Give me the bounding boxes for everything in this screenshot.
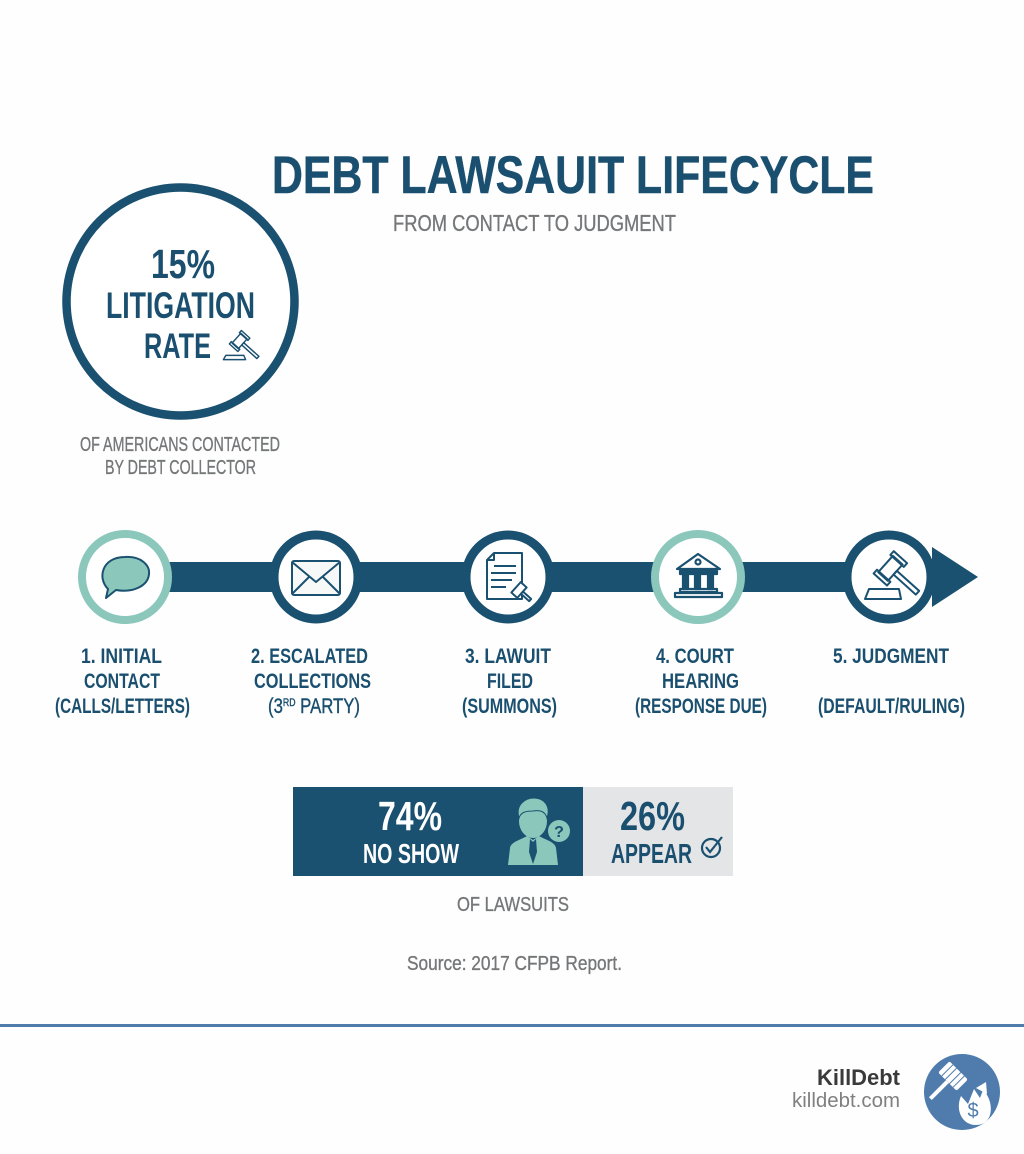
icon: person with question mark	[508, 798, 570, 865]
label: step 4: HEARING	[662, 670, 739, 693]
panel: litigation rate circle	[66, 188, 294, 416]
label: no show: NO SHOW	[363, 838, 459, 869]
icon: speech bubble	[102, 557, 149, 598]
caption: litigation rate	[80, 434, 280, 479]
footer brand text: KillDebt	[817, 1065, 901, 1090]
label: step 3	[462, 645, 557, 718]
icon: person with question mark: ?	[554, 824, 564, 841]
icon: gavel	[865, 551, 928, 604]
label: step 4: 4. COURT	[656, 645, 734, 668]
label: litigation: LITIGATION	[106, 285, 255, 326]
step 2: escalated collections	[251, 535, 371, 718]
label: step 5: 5. JUDGMENT	[833, 645, 949, 668]
bar segment: appear	[583, 787, 733, 876]
label: step 2: PARTY)	[296, 695, 360, 718]
icon: courthouse	[675, 554, 722, 597]
logo: gavel and cracked coin	[921, 1054, 1000, 1130]
footer brand text: killdebt.com	[792, 1090, 900, 1112]
label: step 1: CONTACT	[84, 670, 160, 693]
footer divider	[0, 1024, 1024, 1027]
panel: appearance split bar	[293, 787, 733, 876]
label: appear: APPEAR	[611, 838, 692, 869]
caption: litigation rate: OF AMERICANS CONTACTED	[80, 434, 280, 456]
label: step 5: (DEFAULT/RULING)	[818, 695, 965, 718]
icon: document with gavel	[487, 553, 535, 605]
bar segment: no show	[293, 787, 583, 876]
source note: Source: 2017 CFPB Report.	[407, 953, 622, 975]
label: step 3: FILED	[487, 670, 533, 693]
stat: 15%: 15%	[151, 241, 215, 287]
title: DEBT LAWSAUIT LIFECYCLE	[272, 146, 874, 205]
logo: gavel and cracked coin: $	[967, 1100, 979, 1122]
label: step 2: (3	[268, 695, 287, 718]
step 1: initial contact	[55, 534, 190, 718]
timeline arrow	[165, 547, 978, 607]
icon: check mark	[702, 837, 722, 857]
caption: litigation rate: BY DEBT COLLECTOR	[105, 457, 256, 479]
label: step 1: 1. INITIAL	[81, 645, 162, 668]
label: step 2: RD	[283, 697, 296, 709]
stat: 74%: 74%	[378, 793, 442, 839]
label: rate: RATE	[144, 327, 211, 366]
subtitle: FROM CONTACT TO JUDGMENT	[393, 210, 676, 236]
icon: envelope	[292, 561, 340, 595]
label: step 3: (SUMMONS)	[462, 695, 557, 718]
step 3: lawsuit filed	[462, 535, 557, 718]
label: step 2: 2. ESCALATED	[251, 645, 368, 668]
label: step 4	[635, 645, 767, 718]
label: step 2	[251, 645, 371, 718]
label: step 1	[55, 645, 190, 718]
label: step 5	[818, 645, 965, 718]
step 4: court hearing	[635, 534, 767, 718]
label: step 2: COLLECTIONS	[254, 670, 371, 693]
label: step 1: (CALLS/LETTERS)	[55, 695, 190, 718]
footer brand text	[792, 1065, 901, 1112]
label: step 3: 3. LAWUIT	[465, 645, 551, 668]
icon: small gavel	[223, 330, 264, 364]
step 5: judgment	[818, 535, 965, 718]
caption: of lawsuits: OF LAWSUITS	[457, 894, 569, 916]
stat: 26%: 26%	[620, 793, 685, 839]
label: step 4: (RESPONSE DUE)	[635, 695, 767, 718]
